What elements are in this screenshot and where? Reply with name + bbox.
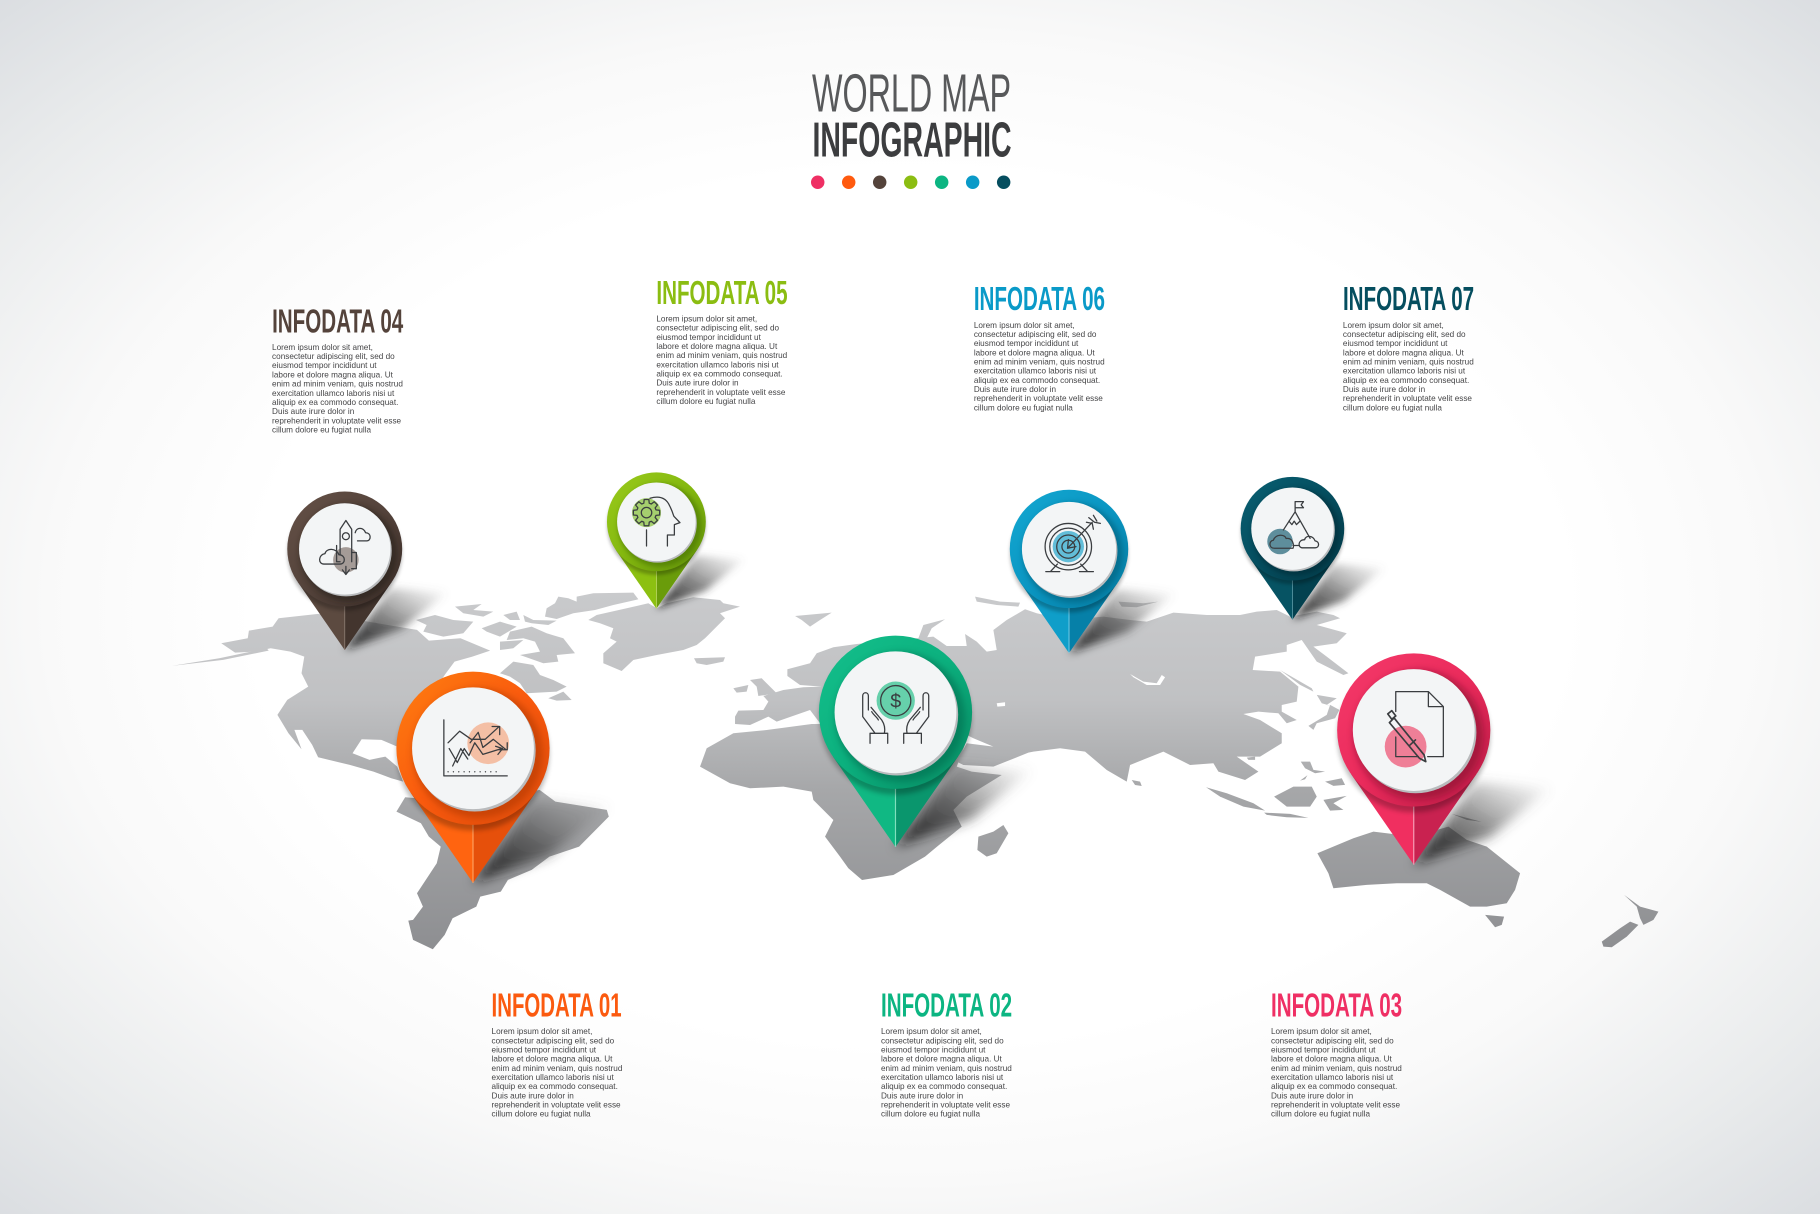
info block 04: aliquip ex ea commodo consequat. bbox=[272, 398, 398, 407]
info block 03 bbox=[1271, 987, 1402, 1119]
info block 06: aliquip ex ea commodo consequat. bbox=[974, 376, 1100, 385]
info block 03: Lorem ipsum dolor sit amet, bbox=[1271, 1027, 1372, 1036]
info block 05: INFODATA 05 bbox=[656, 274, 788, 311]
icon: target with arrow bbox=[1045, 515, 1100, 572]
pin 05: green head bbox=[607, 472, 745, 609]
info block 03: exercitation ullamco laboris nisi ut bbox=[1271, 1073, 1394, 1082]
info block 07: enim ad minim veniam, quis nostrud bbox=[1343, 358, 1474, 367]
icon: document and pen bbox=[1385, 692, 1443, 768]
north and south america mainland bbox=[172, 614, 609, 949]
info block 02: cillum dolore eu fugiat nulla bbox=[881, 1110, 980, 1119]
info block 07: Lorem ipsum dolor sit amet, bbox=[1343, 321, 1444, 330]
pin 06: blue target bbox=[1010, 490, 1175, 653]
icon: head with gear bbox=[632, 497, 680, 546]
info block 04 bbox=[272, 303, 404, 434]
title bbox=[812, 65, 1012, 168]
icon: mountain with flag and clouds bbox=[1267, 502, 1319, 554]
icon: rocket and clouds bbox=[320, 521, 370, 575]
icon: hands holding coin: $ bbox=[890, 691, 901, 713]
info block 02 bbox=[881, 987, 1012, 1119]
arctic islands, greenland, iceland and british isles bbox=[416, 593, 777, 701]
info block 05: enim ad minim veniam, quis nostrud bbox=[656, 351, 788, 360]
info block 03: cillum dolore eu fugiat nulla bbox=[1271, 1110, 1370, 1119]
info block 02: reprehenderit in voluptate velit esse bbox=[881, 1100, 1010, 1109]
info block 06: reprehenderit in voluptate velit esse bbox=[974, 394, 1103, 403]
eurasia and africa bbox=[700, 597, 1348, 880]
info block 07: cillum dolore eu fugiat nulla bbox=[1343, 403, 1442, 412]
info block 02: eiusmod tempor incididunt ut bbox=[881, 1045, 986, 1054]
info block 07: INFODATA 07 bbox=[1343, 280, 1474, 317]
pin 04: brown rocket bbox=[287, 492, 447, 650]
info block 07: Duis aute irure dolor in bbox=[1343, 385, 1426, 394]
info block 02: INFODATA 02 bbox=[881, 987, 1012, 1024]
info block 05: exercitation ullamco laboris nisi ut bbox=[656, 360, 779, 369]
title: INFOGRAPHIC bbox=[813, 113, 1012, 168]
info block 06: Lorem ipsum dolor sit amet, bbox=[974, 321, 1075, 330]
info block 02: aliquip ex ea commodo consequat. bbox=[881, 1082, 1007, 1091]
world map bbox=[172, 593, 1658, 949]
pin 01: orange chart bbox=[396, 672, 610, 883]
info block 05 bbox=[656, 274, 788, 406]
info block 02: consectetur adipiscing elit, sed do bbox=[881, 1036, 1004, 1045]
info block 05: labore et dolore magna aliqua. Ut bbox=[656, 342, 778, 351]
info block 01: exercitation ullamco laboris nisi ut bbox=[492, 1073, 614, 1082]
info block 07: aliquip ex ea commodo consequat. bbox=[1343, 376, 1469, 385]
info block 04: exercitation ullamco laboris nisi ut bbox=[272, 389, 395, 398]
title: WORLD MAP bbox=[812, 65, 1011, 124]
info block 05: Lorem ipsum dolor sit amet, bbox=[656, 314, 757, 323]
info block 02: exercitation ullamco laboris nisi ut bbox=[881, 1073, 1004, 1082]
info block 03: eiusmod tempor incididunt ut bbox=[1271, 1045, 1376, 1054]
pin 02: teal money bbox=[819, 636, 1032, 847]
info block 06: eiusmod tempor incididunt ut bbox=[974, 339, 1079, 348]
info block 01 bbox=[492, 987, 623, 1119]
info block 04: INFODATA 04 bbox=[272, 303, 404, 340]
info block 03: consectetur adipiscing elit, sed do bbox=[1271, 1036, 1394, 1045]
info block 06: INFODATA 06 bbox=[974, 280, 1105, 317]
info block 04: Lorem ipsum dolor sit amet, bbox=[272, 343, 373, 352]
info block 02: enim ad minim veniam, quis nostrud bbox=[881, 1064, 1012, 1073]
info block 04: cillum dolore eu fugiat nulla bbox=[272, 425, 372, 434]
info block 07: consectetur adipiscing elit, sed do bbox=[1343, 330, 1466, 339]
colour dots row bbox=[811, 175, 1010, 189]
info block 04: eiusmod tempor incididunt ut bbox=[272, 361, 377, 370]
info block 01: INFODATA 01 bbox=[492, 987, 622, 1024]
info block 07: exercitation ullamco laboris nisi ut bbox=[1343, 367, 1466, 376]
info block 06: Duis aute irure dolor in bbox=[974, 385, 1057, 394]
info block 06: labore et dolore magna aliqua. Ut bbox=[974, 348, 1095, 357]
info block 06: cillum dolore eu fugiat nulla bbox=[974, 403, 1073, 412]
info block 02: Lorem ipsum dolor sit amet, bbox=[881, 1027, 982, 1036]
info block 01: reprehenderit in voluptate velit esse bbox=[492, 1100, 621, 1109]
info block 01: enim ad minim veniam, quis nostrud bbox=[492, 1064, 623, 1073]
info block 05: aliquip ex ea commodo consequat. bbox=[656, 370, 783, 379]
info block 02: labore et dolore magna aliqua. Ut bbox=[881, 1055, 1003, 1064]
info block 04: Duis aute irure dolor in bbox=[272, 407, 355, 416]
info block 05: consectetur adipiscing elit, sed do bbox=[656, 324, 779, 333]
info block 07: eiusmod tempor incididunt ut bbox=[1343, 339, 1448, 348]
info block 01: cillum dolore eu fugiat nulla bbox=[492, 1110, 591, 1119]
info block 05: reprehenderit in voluptate velit esse bbox=[656, 388, 786, 397]
info block 01: labore et dolore magna aliqua. Ut bbox=[492, 1055, 613, 1064]
info block 06: exercitation ullamco laboris nisi ut bbox=[974, 367, 1097, 376]
icon: hands holding coin bbox=[863, 682, 929, 743]
info block 03: aliquip ex ea commodo consequat. bbox=[1271, 1082, 1397, 1091]
info block 01: Duis aute irure dolor in bbox=[492, 1091, 574, 1100]
info block 03: reprehenderit in voluptate velit esse bbox=[1271, 1100, 1400, 1109]
info block 01: aliquip ex ea commodo consequat. bbox=[492, 1082, 618, 1091]
info block 01: eiusmod tempor incididunt ut bbox=[492, 1045, 597, 1054]
info block 03: INFODATA 03 bbox=[1271, 987, 1402, 1024]
australia and new zealand bbox=[1317, 814, 1658, 947]
info block 04: consectetur adipiscing elit, sed do bbox=[272, 352, 395, 361]
info block 07: reprehenderit in voluptate velit esse bbox=[1343, 394, 1472, 403]
info block 05: eiusmod tempor incididunt ut bbox=[656, 333, 762, 342]
info block 06: consectetur adipiscing elit, sed do bbox=[974, 330, 1097, 339]
pin 07: dark teal mountain bbox=[1241, 477, 1385, 620]
info block 03: labore et dolore magna aliqua. Ut bbox=[1271, 1055, 1393, 1064]
info block 06: enim ad minim veniam, quis nostrud bbox=[974, 358, 1105, 367]
info block 03: Duis aute irure dolor in bbox=[1271, 1091, 1354, 1100]
info block 02: Duis aute irure dolor in bbox=[881, 1091, 964, 1100]
southeast asian islands bbox=[1206, 670, 1347, 818]
info block 05: Duis aute irure dolor in bbox=[656, 379, 739, 388]
info block 06 bbox=[974, 280, 1105, 412]
icon: line chart with arrows bbox=[444, 720, 509, 776]
info block 04: labore et dolore magna aliqua. Ut bbox=[272, 370, 394, 379]
info block 01: consectetur adipiscing elit, sed do bbox=[492, 1036, 615, 1045]
pin 03: red document bbox=[1337, 653, 1551, 865]
info block 05: cillum dolore eu fugiat nulla bbox=[656, 397, 756, 406]
info block 07: labore et dolore magna aliqua. Ut bbox=[1343, 348, 1465, 357]
info block 04: enim ad minim veniam, quis nostrud bbox=[272, 380, 403, 389]
info block 07 bbox=[1343, 280, 1474, 412]
info block 01: Lorem ipsum dolor sit amet, bbox=[492, 1027, 592, 1036]
info block 04: reprehenderit in voluptate velit esse bbox=[272, 416, 402, 425]
info block 03: enim ad minim veniam, quis nostrud bbox=[1271, 1064, 1402, 1073]
